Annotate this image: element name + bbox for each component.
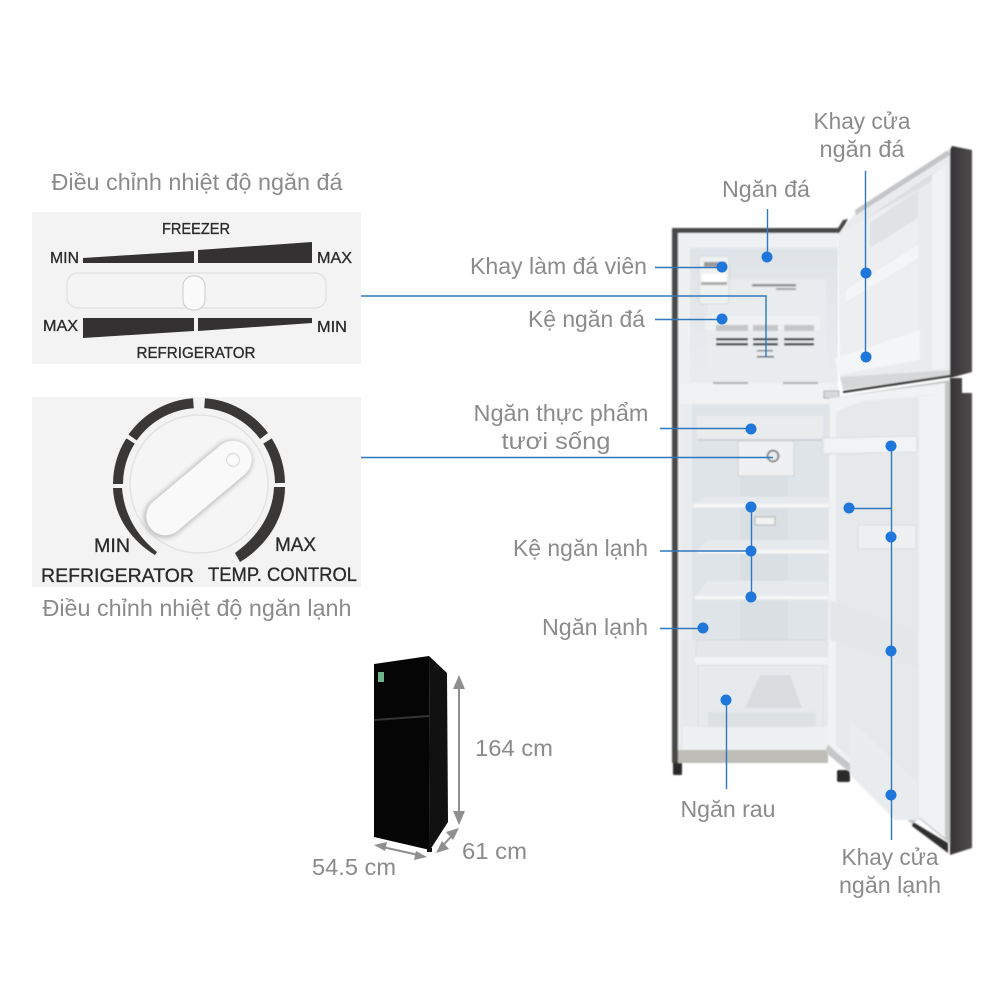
callout: Ngăn lạnh — [542, 614, 708, 640]
dimension labels: 164 cm — [475, 735, 553, 761]
illustration: small closed fridge with dimensions — [312, 656, 553, 880]
freezer interior — [690, 248, 838, 383]
ice tray — [699, 256, 729, 304]
dial labels — [41, 535, 357, 587]
slider labels: MAX — [317, 250, 352, 267]
illustration: open fridge — [672, 146, 972, 855]
callout: Khay cửa ngăn lạnh: ngăn lạnh — [839, 872, 941, 898]
callout: Khay cửa ngăn lạnh — [839, 440, 941, 898]
arrow: height — [453, 675, 465, 825]
callout: Ngăn thực phẩm tươi sống — [474, 400, 756, 454]
base strip — [678, 750, 828, 763]
dial knob — [135, 431, 261, 547]
dial labels: MIN — [94, 536, 130, 557]
slider knob — [183, 276, 205, 310]
dial face — [130, 415, 268, 553]
dimension labels: 61 cm — [462, 838, 527, 864]
lower door — [823, 378, 972, 855]
crisper — [680, 640, 830, 750]
slider labels: MIN — [50, 250, 79, 267]
slider labels — [43, 221, 352, 362]
dial labels: REFRIGERATOR — [41, 566, 194, 587]
callout: Kệ ngăn đá — [528, 306, 728, 332]
feet — [673, 762, 682, 775]
cabinet frame — [672, 219, 848, 763]
arrow: depth — [436, 828, 459, 853]
callout: Kệ ngăn lạnh — [513, 502, 756, 602]
dimension labels — [312, 735, 553, 880]
shelves — [694, 497, 832, 504]
connector: fridge dial to its location — [361, 456, 773, 458]
slider labels: REFRIGERATOR — [136, 345, 256, 362]
heading: fridge temperature adjustment: Điều chỉnh nhiệt độ ngăn lạnh — [42, 595, 352, 621]
dial labels: TEMP. CONTROL — [208, 565, 357, 586]
callout: Ngăn lạnh: Ngăn lạnh — [542, 614, 648, 640]
fridge interior — [692, 404, 830, 644]
dimension labels: 54.5 cm — [312, 854, 396, 880]
heading: freezer temperature adjustment: Điều chỉnh nhiệt độ ngăn đá — [52, 169, 343, 195]
slider labels: MAX — [43, 318, 78, 335]
callout: Kệ ngăn lạnh: Kệ ngăn lạnh — [513, 535, 648, 561]
freezer shelf — [705, 316, 820, 330]
air vent and dial — [738, 441, 794, 476]
callout: Khay làm đá viên — [470, 253, 728, 279]
arrow: width — [374, 842, 427, 860]
slider track — [67, 273, 326, 308]
callout: Ngăn đá — [722, 176, 810, 262]
panel: refrigerator dial control — [32, 397, 361, 587]
closed fridge body — [374, 656, 448, 852]
slider scale bars — [83, 242, 312, 338]
callout: Khay cửa ngăn đá: ngăn đá — [820, 136, 905, 162]
top fresh compartment — [697, 416, 823, 440]
callout: Ngăn thực phẩm tươi sống: Ngăn thực phẩm — [474, 400, 648, 426]
panel: freezer slider control — [32, 212, 361, 364]
slider labels: MIN — [317, 319, 347, 336]
dial scale arcs — [118, 403, 280, 484]
fridge cabinet — [672, 219, 850, 782]
callout: Khay cửa ngăn đá: Khay cửa — [814, 108, 911, 134]
callout: Ngăn đá: Ngăn đá — [722, 176, 810, 202]
connector: freezer slider to its location — [361, 296, 766, 357]
upper door — [824, 146, 972, 398]
slider labels: FREEZER — [162, 221, 230, 238]
callout: Ngăn rau — [680, 694, 776, 822]
callout: Khay cửa ngăn đá — [814, 108, 911, 362]
callout: Khay cửa ngăn lạnh: Khay cửa — [842, 844, 939, 870]
callout: Ngăn rau: Ngăn rau — [680, 796, 776, 822]
freezer vents — [752, 284, 796, 286]
divider between compartments — [680, 384, 830, 404]
callout: Ngăn thực phẩm tươi sống: tươi sống — [502, 428, 610, 454]
dial labels: MAX — [275, 535, 316, 556]
callout: Khay làm đá viên: Khay làm đá viên — [470, 253, 647, 279]
callout: Kệ ngăn đá: Kệ ngăn đá — [528, 306, 645, 332]
